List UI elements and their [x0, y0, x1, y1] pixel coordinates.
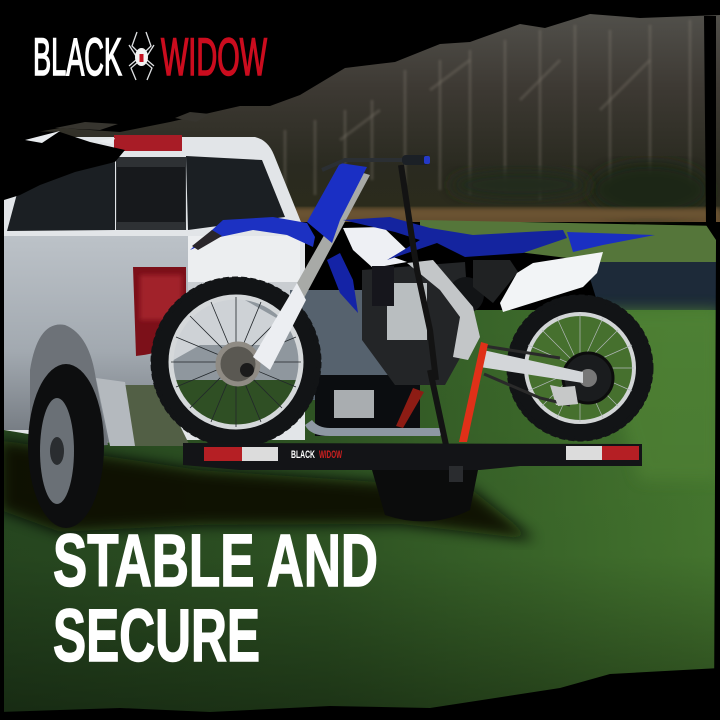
- swingarm: [480, 350, 583, 383]
- logo word WIDOW: WIDOW: [161, 28, 267, 87]
- headline: [53, 519, 378, 677]
- fork: [297, 172, 370, 300]
- brush streak fragments: [55, 112, 210, 130]
- pickup truck: [4, 135, 478, 528]
- motorcycle: [153, 155, 655, 445]
- rear wheel: [509, 297, 651, 439]
- motorcycle carrier rack: [183, 342, 642, 482]
- wheel well and rear tyre: [30, 325, 108, 450]
- ground shadow under truck and rack: [0, 440, 535, 540]
- rear window: [7, 156, 285, 231]
- front fender: [190, 217, 315, 250]
- far side wheel: [372, 470, 478, 521]
- rear fender of front mudguard: [327, 253, 358, 313]
- chrome bumper: [125, 385, 190, 446]
- front wheel: [153, 279, 319, 445]
- tail light: [133, 267, 186, 356]
- radiator shroud: [343, 227, 407, 268]
- tank and seat: [343, 217, 567, 260]
- dark airbox: [473, 260, 518, 303]
- front number plate: [307, 163, 367, 243]
- tie-down strap: [401, 165, 446, 445]
- centre hitch: [449, 466, 463, 482]
- reflector right: [566, 446, 602, 460]
- motorcycle carrier rack: WIDOW: [319, 449, 342, 461]
- icon: spider: [129, 32, 154, 80]
- headline: SECURE: [53, 594, 260, 677]
- engine: [362, 262, 470, 385]
- headline: STABLE AND: [53, 519, 378, 602]
- red strap: [459, 342, 488, 442]
- reflector left: [204, 447, 242, 461]
- rear fender: [567, 232, 655, 252]
- brand logo: [33, 28, 267, 87]
- rack logo: BLACK: [291, 449, 315, 461]
- aluminium frame: [407, 260, 480, 360]
- third brake light: [114, 135, 182, 151]
- hitch receiver and plate: [315, 375, 420, 436]
- logo word BLACK: BLACK: [33, 28, 122, 87]
- rear side panel: [500, 252, 603, 312]
- handlebar: [322, 160, 428, 170]
